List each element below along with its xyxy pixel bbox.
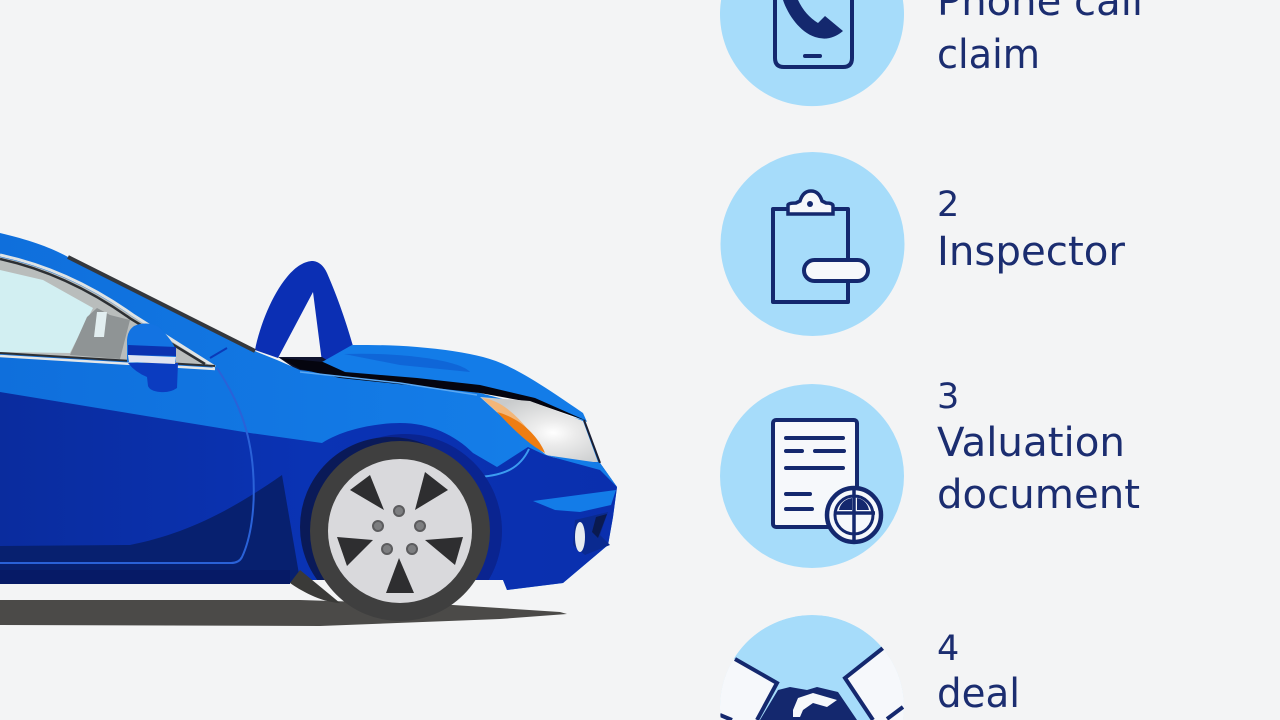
hood panel <box>322 345 587 422</box>
step 4 label: 4 <box>937 629 959 669</box>
window top trim <box>0 255 215 367</box>
seat <box>70 308 130 359</box>
step 4 label: deal <box>937 671 1020 717</box>
step 2 label: Inspector <box>937 229 1126 275</box>
hood crack <box>280 358 587 421</box>
side mirror <box>127 324 178 392</box>
step 1 icon: phone <box>720 0 904 106</box>
door gap <box>210 348 227 358</box>
hood shade <box>344 354 470 372</box>
step 2 icon: clipboard <box>720 152 904 336</box>
rim <box>328 459 472 603</box>
spoke holes <box>337 472 463 593</box>
under-hood dark gap <box>278 357 345 372</box>
windshield edge <box>68 257 255 351</box>
raised hood <box>255 261 353 362</box>
door outline <box>0 368 254 563</box>
step 3 label <box>937 377 1140 518</box>
window sill trim <box>0 353 215 366</box>
step 3 label: Valuation <box>937 420 1125 466</box>
window glass <box>0 270 93 353</box>
ground shadow <box>0 600 567 626</box>
step 3 label: 3 <box>937 377 959 417</box>
sill shadow <box>0 475 300 584</box>
bumper highlight <box>533 490 616 512</box>
fender highlight <box>300 372 477 395</box>
step 3 label: document <box>937 472 1140 518</box>
headlight <box>480 397 600 463</box>
seat highlight <box>94 312 107 337</box>
rear tyre shadow <box>290 570 340 603</box>
step 2 label: 2 <box>937 185 959 225</box>
lower door panel <box>0 392 617 590</box>
rocker strip <box>0 570 290 584</box>
car body <box>0 233 617 590</box>
tyre <box>310 441 490 621</box>
step 1 label <box>937 0 1143 78</box>
step 4 icon: handshake <box>720 615 904 720</box>
step 3 icon: valuation document <box>720 384 904 568</box>
lug nuts <box>373 506 425 554</box>
upper bumper strip <box>545 455 617 487</box>
arch shadow <box>300 434 502 580</box>
step 1 label: claim <box>937 32 1040 78</box>
window interior <box>0 257 213 365</box>
car illustration <box>0 233 617 628</box>
grille <box>573 512 610 555</box>
fog lamp <box>575 522 585 552</box>
step 2 label <box>937 185 1126 275</box>
fender crease <box>480 449 529 477</box>
step 4 label <box>937 629 1020 717</box>
grille slit <box>592 514 607 538</box>
front wheel <box>310 441 490 621</box>
